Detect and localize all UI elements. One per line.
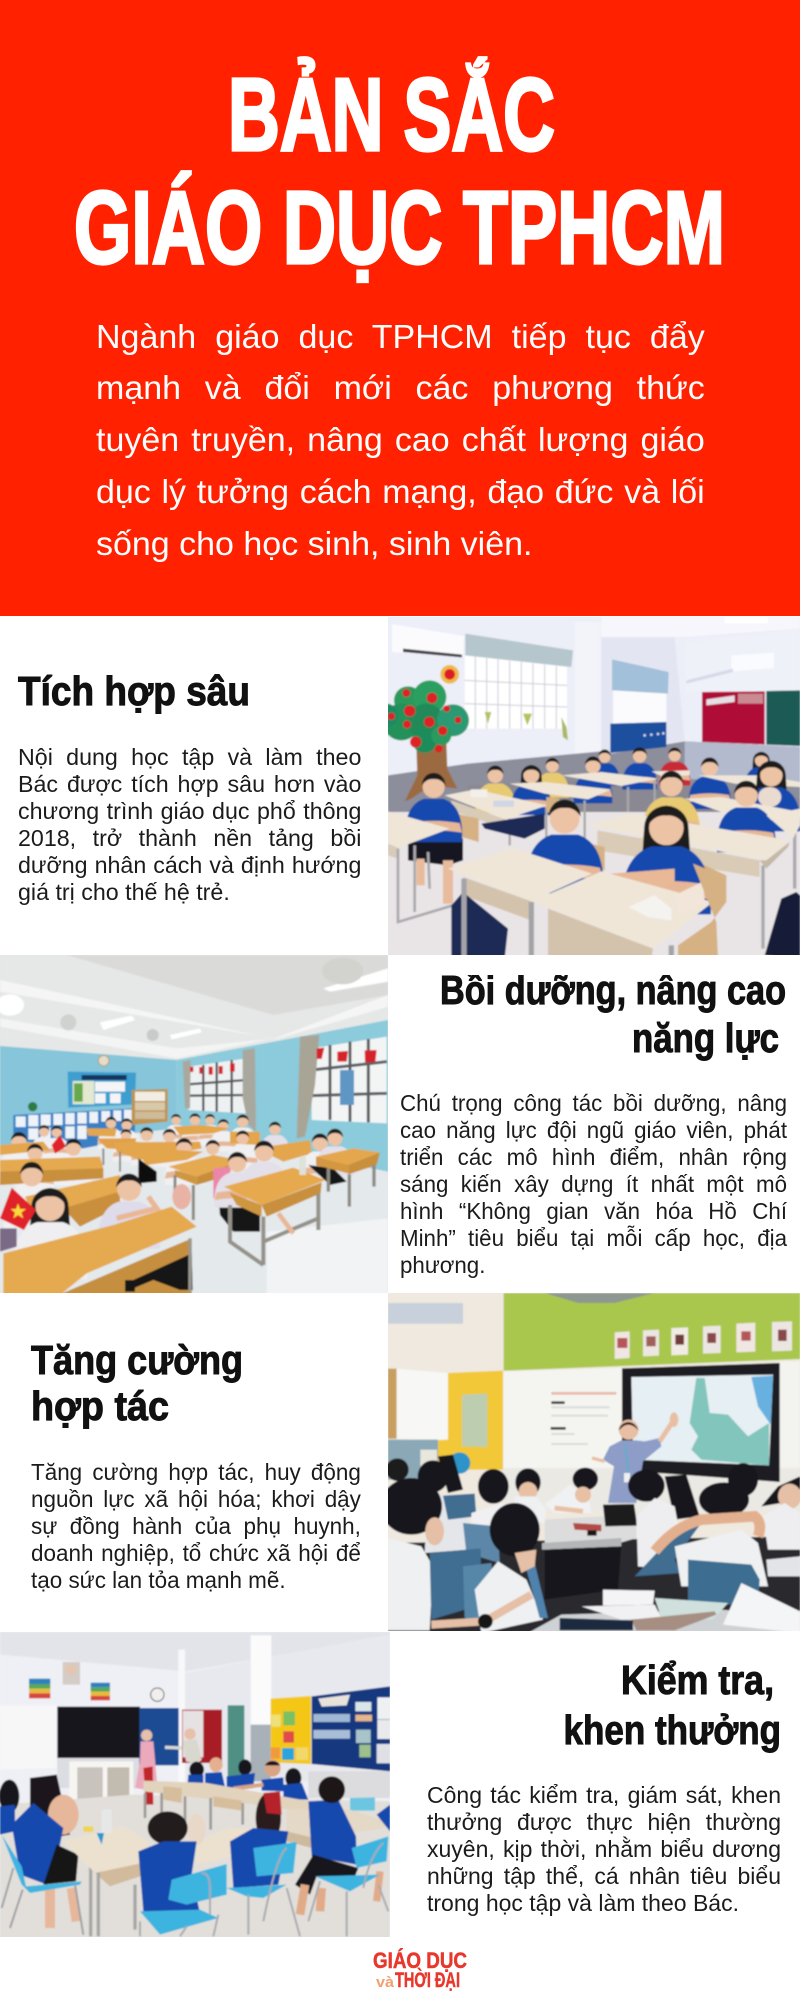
text block: Tăng cường hợp tác: tạo sức lan tỏa mạnh mẽ. xyxy=(31,1566,286,1592)
attendance and display boards xyxy=(139,1686,390,1777)
text block: Tích hợp sâu: Bác được tích hợp sâu hơn vào xyxy=(18,771,361,797)
text block: Kiểm tra: xuyên, kịp thời, nhằm biểu dương xyxy=(427,1836,781,1862)
text block: Tăng cường hợp tác: doanh nghiệp, tổ chức xã hội để xyxy=(31,1540,361,1566)
front left desks and kids xyxy=(4,1162,160,1279)
Vietnamese flag xyxy=(0,1135,66,1230)
heading: Tăng cường hợp tác: hợp tác xyxy=(31,1383,169,1429)
clock xyxy=(98,1055,109,1066)
text block: Kiểm tra: thưởng được thực hiện thường xyxy=(427,1808,781,1834)
back table xyxy=(143,1781,310,1845)
cabinet and yellow wall xyxy=(388,1369,503,1480)
front desk xyxy=(0,1207,197,1295)
right big desk xyxy=(583,809,800,949)
wall dado xyxy=(388,741,800,819)
heading: Bồi dưỡng, nâng cao năng lực xyxy=(440,975,786,1061)
logo: Giáo dục và Thời đại: và xyxy=(376,1974,395,1991)
photo: classroom with wooden desks xyxy=(0,955,388,1293)
middle students xyxy=(0,1138,288,1220)
notice board xyxy=(68,1072,136,1108)
blue walls xyxy=(0,1020,388,1178)
whiteboard xyxy=(503,1361,800,1511)
heading: Kiểm tra, khen thưởng: Kiểm tra, xyxy=(621,1657,774,1703)
text block: Bồi dưỡng: triển các mô hình điểm, nhân rộng xyxy=(400,1144,787,1170)
text block: Bồi dưỡng: Chú trọng công tác bồi dưỡng, nâng xyxy=(400,1090,787,1116)
text block: Tích hợp sâu: 2018, trở thành nền tảng bồi xyxy=(18,825,361,851)
text block: Tích hợp sâu: giá trị cho thế hệ trẻ. xyxy=(18,879,230,905)
text block: Tích hợp sâu: dưỡng nhân cách và định hướng xyxy=(18,852,361,878)
photo: teacher at interactive screen xyxy=(388,1293,800,1631)
front right desk xyxy=(224,1157,326,1265)
title: BẢN SẮC xyxy=(228,57,555,172)
text block: Kiểm tra: trong học tập và làm theo Bác. xyxy=(427,1890,739,1916)
cabinet right xyxy=(308,1771,390,1798)
papers and desk xyxy=(528,1583,800,1633)
panel: Tăng cường hợp tác text xyxy=(30,1337,361,1592)
heading: Tích hợp sâu: Tích hợp sâu xyxy=(18,668,250,714)
panel: red header xyxy=(0,0,800,616)
heading: Tăng cường hợp tác: Tăng cường xyxy=(31,1337,243,1383)
floor xyxy=(388,812,800,959)
apple tree xyxy=(375,680,469,801)
text block: Kiểm tra: những tập thể, cá nhân tiêu biểu xyxy=(427,1862,781,1888)
whiteboard and TV xyxy=(0,1705,140,1807)
interactive screen xyxy=(622,1363,780,1482)
panel: Kiểm tra text xyxy=(427,1657,781,1916)
floor xyxy=(0,1128,388,1295)
back-row students xyxy=(475,747,778,815)
heading: Kiểm tra, khen thưởng xyxy=(564,1657,781,1753)
text block: Bồi dưỡng: phương. xyxy=(400,1252,485,1278)
blue chairs xyxy=(140,1836,388,1936)
table with laptop xyxy=(542,1504,637,1600)
panel: Bồi dưỡng text xyxy=(400,975,788,1278)
intro paragraph: tuyên truyền, nâng cao chất lượng giáo xyxy=(96,421,705,458)
text block: Tăng cường hợp tác: nguồn lực xã hội hóa; khơi dậy xyxy=(31,1486,361,1512)
intro paragraph xyxy=(96,318,705,562)
text block: Bồi dưỡng: hình “Không gian văn hóa Hồ Chí xyxy=(400,1198,787,1224)
text block: Tăng cường hợp tác: Tăng cường hợp tác, huy động xyxy=(31,1458,361,1484)
left desk and boy xyxy=(388,773,463,922)
boards xyxy=(702,690,800,746)
text block: Tăng cường hợp tác xyxy=(31,1458,361,1592)
intro paragraph: dục lý tưởng cách mạng, đạo đức và lối xyxy=(96,473,705,510)
girl with pink backpack xyxy=(172,1152,260,1232)
title xyxy=(74,56,725,285)
floor xyxy=(0,1795,390,1938)
lockers and shelf xyxy=(13,1089,168,1148)
text block: Tăng cường hợp tác: sự đồng hành của phụ huynh, xyxy=(31,1512,361,1538)
right table xyxy=(287,1810,387,1848)
floor shadow xyxy=(388,1536,800,1633)
text block: Bồi dưỡng: cao năng lực đội ngũ giáo viên, phát xyxy=(400,1117,787,1143)
back rows students xyxy=(0,1113,290,1179)
panel: Tích hợp sâu text xyxy=(18,668,361,905)
text block: Bồi dưỡng: sáng kiến xây dựng ít nhất một mô xyxy=(400,1171,787,1197)
windows and blinds xyxy=(465,634,669,753)
ceiling xyxy=(0,952,388,1092)
wall posters xyxy=(28,1662,164,1701)
text block: Tích hợp sâu: Nội dung học tập và làm theo xyxy=(18,744,361,770)
air conditioners xyxy=(392,624,774,684)
text block: Kiểm tra: Công tác kiểm tra, giám sát, khen xyxy=(427,1782,781,1808)
photo: students in a U-shaped classroom xyxy=(0,1632,390,1937)
intro paragraph: mạnh và đổi mới các phương thức xyxy=(96,369,705,406)
text block: Kiểm tra xyxy=(427,1782,781,1916)
sun decoration xyxy=(440,665,459,684)
intro paragraph: Ngành giáo dục TPHCM tiếp tục đẩy xyxy=(96,318,705,355)
intro paragraph: sống cho học sinh, sinh viên. xyxy=(96,525,532,562)
foreground students xyxy=(526,799,711,914)
background students xyxy=(386,1452,598,1553)
text block: Bồi dưỡng: Minh” tiêu biểu tại mỗi cấp học, địa xyxy=(400,1225,787,1251)
middle and right students xyxy=(138,1776,390,1915)
left table xyxy=(63,1810,150,1936)
left students xyxy=(0,1775,83,1935)
logo: Giáo dục và Thời đại xyxy=(373,1948,467,1992)
foreground students xyxy=(381,1478,548,1633)
photo: classroom with blue uniforms xyxy=(388,617,800,955)
windows xyxy=(183,1035,387,1138)
text block: Tích hợp sâu xyxy=(18,744,361,905)
teachers xyxy=(135,1728,202,1805)
heading: Tăng cường hợp tác xyxy=(30,1337,243,1429)
green wall with posters xyxy=(388,1293,800,1371)
middle students xyxy=(642,761,800,852)
back desks xyxy=(445,770,800,845)
far students xyxy=(187,1757,375,1811)
right students xyxy=(628,1463,800,1605)
text block: Tích hợp sâu: chương trình giáo dục phổ thông xyxy=(18,798,361,824)
teacher xyxy=(592,1412,678,1503)
mid desks xyxy=(0,1129,380,1207)
text block: Bồi dưỡng xyxy=(400,1090,788,1278)
foreground desks xyxy=(448,848,800,959)
